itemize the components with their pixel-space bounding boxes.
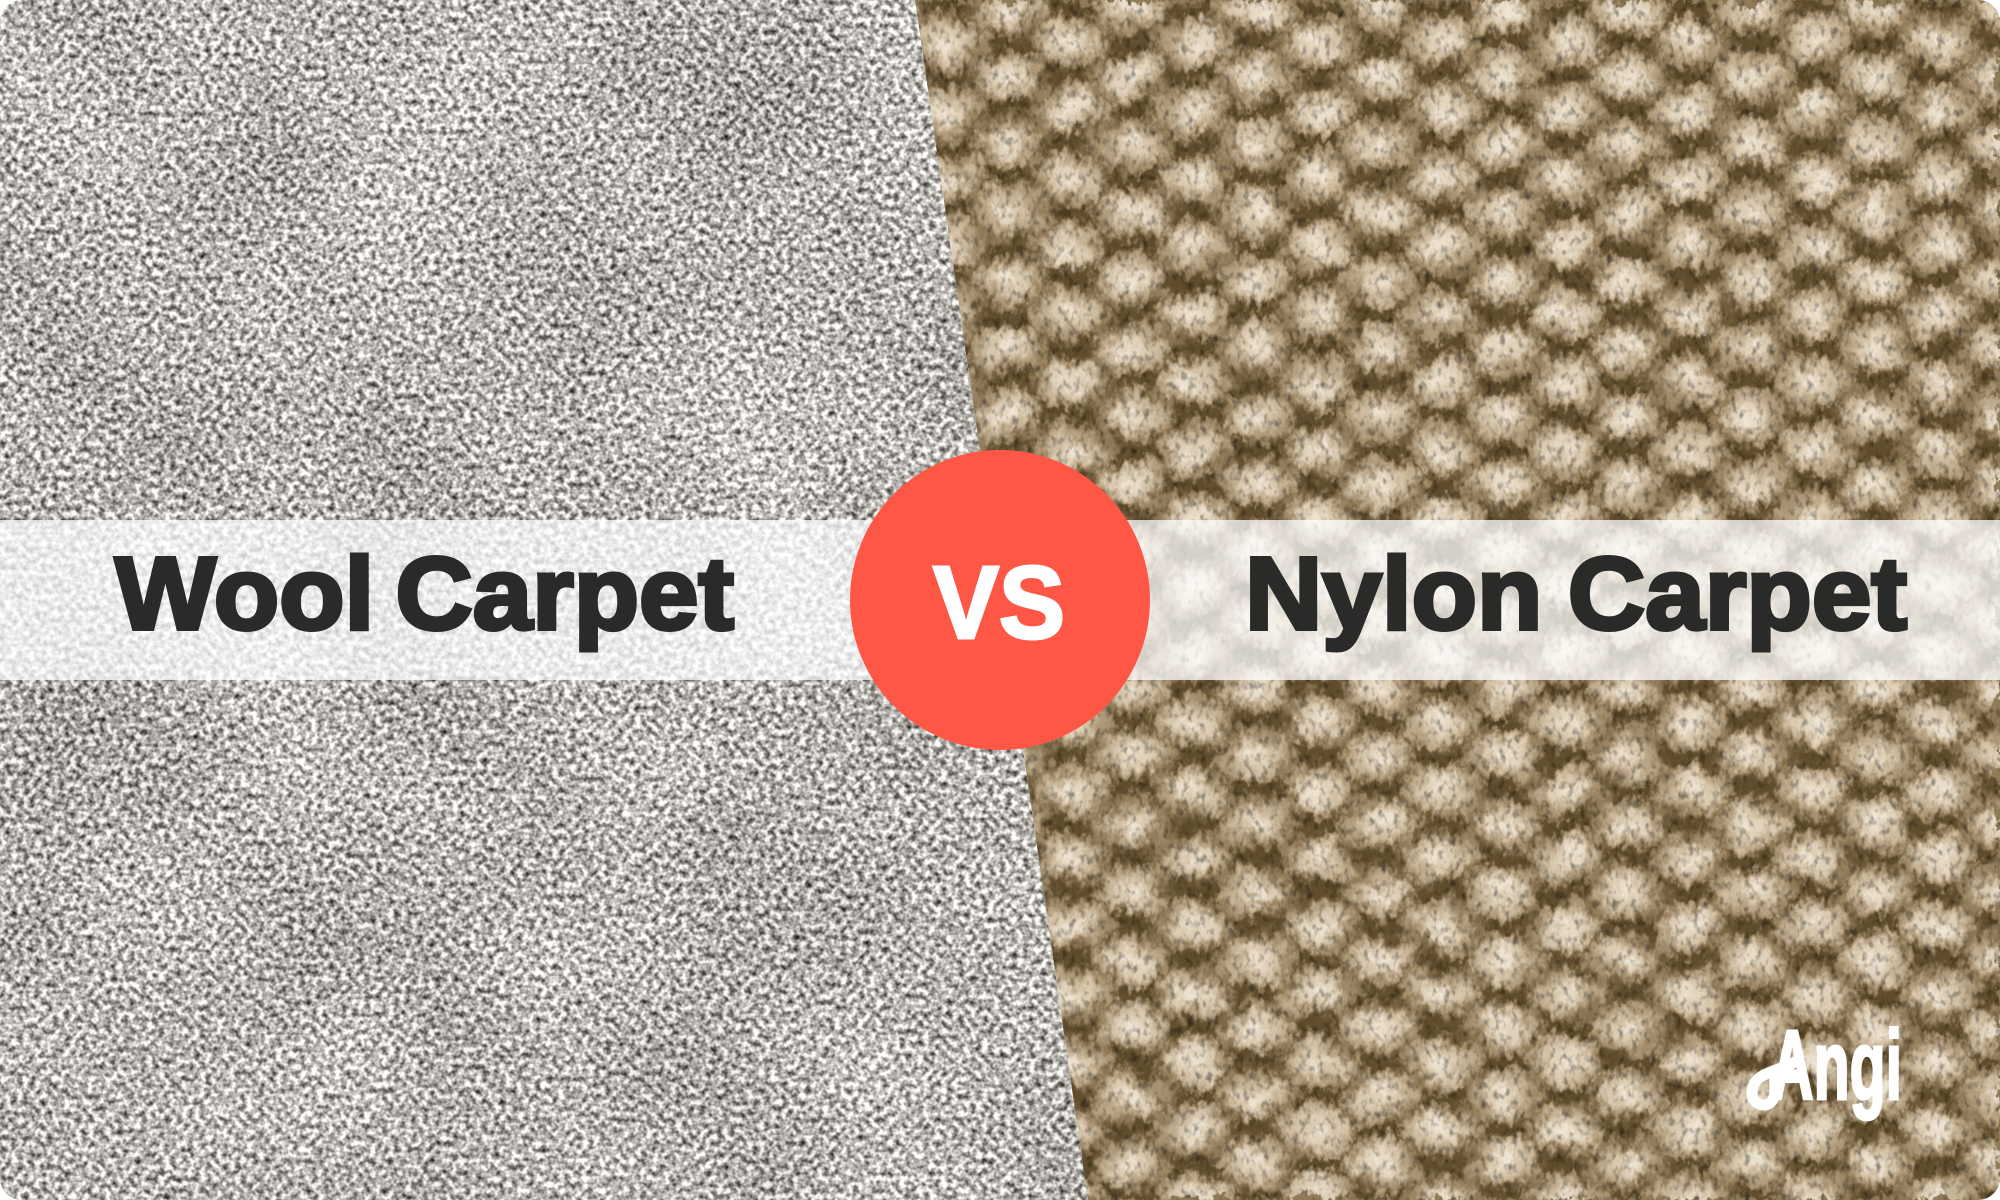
- heading: nylon carpet: Nylon Carpet: [1245, 536, 1907, 651]
- heading: wool carpet: Wool Carpet: [115, 536, 734, 651]
- panel: wool carpet texture: [0, 0, 1100, 1200]
- badge circle: [850, 450, 1150, 750]
- translucent title band: [0, 520, 2000, 680]
- vs badge: [850, 450, 1150, 750]
- logo: Angi: [1746, 1026, 1899, 1122]
- panel: nylon carpet texture: [880, 0, 2000, 1200]
- logo loop: [1752, 1062, 1795, 1105]
- badge text: VS: [933, 545, 1065, 660]
- logo wordmark: Angi: [1771, 1010, 1902, 1120]
